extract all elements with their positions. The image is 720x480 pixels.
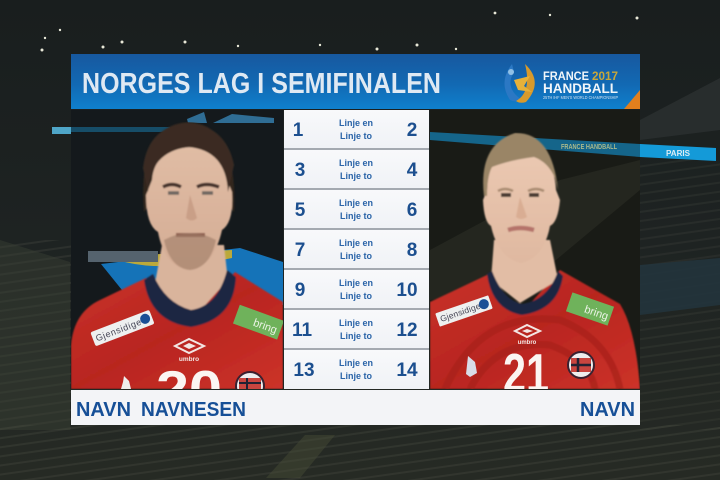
row 1: Linje to: [340, 131, 372, 141]
LED ribbon: right with PARIS: PARIS: [666, 149, 691, 158]
player: jersey: [430, 270, 640, 389]
logo wordmark: 25TH IHF MEN'S WORLD CHAMPIONSHIP: [543, 95, 618, 100]
header banner: [71, 54, 640, 109]
title: NORGES LAG I SEMIFINALEN: [82, 67, 441, 99]
sponsor patch: Bring: [566, 292, 614, 326]
row 3: [284, 190, 429, 228]
logo wordmark: [543, 69, 618, 100]
player: nose: [516, 197, 527, 219]
row 1: [284, 110, 429, 148]
mascot: [121, 376, 131, 389]
LED ribbon behind right player: [430, 132, 640, 157]
row 1: 2: [407, 120, 417, 141]
LED ribbon behind left player: [71, 127, 170, 132]
player: hair: [483, 133, 558, 196]
player: eyes: [168, 191, 213, 195]
row 2: 3: [295, 160, 305, 181]
row 4: 8: [407, 240, 417, 261]
distant scoreboard: [187, 112, 274, 123]
brand logo: umbro: [175, 339, 204, 363]
court: [101, 248, 283, 305]
row 6: Linje en: [339, 318, 373, 328]
sponsor patch: Bring: bring: [583, 304, 610, 323]
player: brows: [498, 189, 544, 191]
row 4: Linje en: [339, 238, 373, 248]
player: neck: [154, 244, 228, 312]
row 2: [284, 150, 429, 188]
brand logo: umbro: [515, 325, 540, 346]
court centre: [125, 250, 232, 266]
sponsor patch: Gjensidige: [435, 295, 493, 327]
jersey number 20: 20: [156, 361, 222, 419]
row 5: [284, 270, 429, 308]
flag badge: [235, 371, 265, 389]
player: beard: [164, 233, 216, 270]
logo wordmark: FRANCE: [543, 69, 589, 83]
row 6: 12: [396, 320, 418, 341]
sponsor patch: Gjensidige: Gjensidige: [439, 301, 482, 324]
row 6: [284, 310, 429, 348]
sponsor patch: Bring: [233, 305, 284, 340]
name bar: [71, 390, 640, 425]
player: face: [482, 156, 561, 241]
LED ribbon: right with PARIS: [640, 144, 716, 161]
flag badge: [568, 352, 594, 378]
panel: right player photo: [430, 110, 640, 404]
player: neck: [491, 240, 558, 303]
row 7: [284, 350, 429, 389]
ribbon text: FRANCE HANDBALL: [561, 144, 618, 151]
row 5: Linje en: [339, 278, 373, 288]
player: mouth: [508, 228, 534, 230]
player: face: [144, 146, 234, 246]
row 1: 1: [293, 120, 304, 141]
number table: [284, 110, 429, 389]
row 4: Linje to: [340, 251, 372, 261]
sponsor patch: Bring: bring: [252, 317, 279, 337]
right player name: NAVN: [580, 399, 635, 421]
player: jersey arcs: [445, 319, 620, 389]
left player surname: NAVNESEN: [141, 399, 246, 421]
row 5: 10: [396, 280, 418, 301]
row 2: 4: [407, 160, 418, 181]
row 4: [284, 230, 429, 268]
row 5: 9: [295, 280, 305, 301]
row 7: 13: [293, 360, 315, 381]
advertising boards: [88, 251, 158, 262]
row 3: 6: [407, 200, 417, 221]
jersey number 21: 21: [503, 342, 549, 404]
brand logo: umbro: umbro: [179, 356, 199, 363]
player: hair front: [143, 123, 234, 192]
row 5: Linje to: [340, 291, 372, 301]
row 2: Linje en: [339, 158, 373, 168]
row 7: Linje to: [340, 371, 372, 381]
row 2: Linje to: [340, 171, 372, 181]
row 1: Linje en: [339, 118, 373, 128]
sponsor patch: Gjensidige: [90, 310, 155, 346]
player: jersey: [71, 272, 283, 389]
brand logo: umbro: umbro: [518, 340, 537, 346]
player: mouth: [176, 233, 205, 237]
row 3: Linje to: [340, 211, 372, 221]
logo emblem: [504, 64, 535, 103]
player: hair back: [143, 122, 234, 212]
corner accent: [624, 90, 640, 109]
row 4: 7: [295, 240, 305, 261]
panel: left player photo: [71, 112, 283, 389]
logo wordmark: HANDBALL: [543, 81, 618, 96]
player: nose: [186, 195, 197, 220]
left player first name: NAVN: [76, 399, 131, 421]
row 3: 5: [295, 200, 306, 221]
logo wordmark: 2017: [592, 69, 618, 83]
diagonal stands: [430, 160, 640, 300]
player: eyes: [501, 193, 539, 197]
row 6: 11: [292, 320, 312, 341]
row 3: Linje en: [339, 198, 373, 208]
player: brows: [163, 184, 219, 187]
row 7: Linje en: [339, 358, 373, 368]
player: collar: [144, 270, 236, 327]
LED ribbon: left: [52, 127, 72, 134]
player: collar: [487, 271, 563, 315]
row 6: Linje to: [340, 331, 372, 341]
mascot: [466, 356, 477, 377]
sponsor patch: Gjensidige: Gjensidige: [94, 317, 143, 343]
row 7: 14: [396, 360, 418, 381]
